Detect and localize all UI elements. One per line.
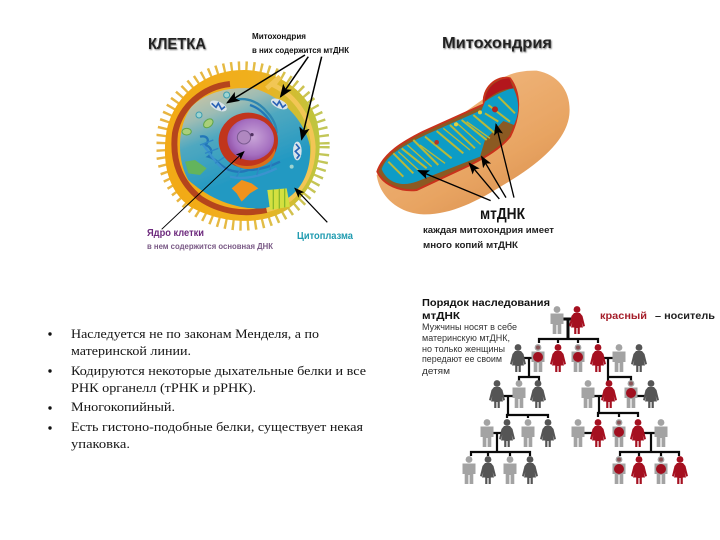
organelles bbox=[182, 92, 294, 210]
label: cell nucleus: в нем содержится основная ДНК bbox=[147, 242, 273, 251]
bullet: encoded proteins bbox=[71, 363, 366, 395]
label: mitochondria contain mtDNA bbox=[252, 32, 349, 55]
pedigree heading text: Мужчины носят в себе bbox=[422, 322, 517, 332]
panel: cell diagram bbox=[162, 55, 327, 229]
cell membrane bbox=[165, 70, 320, 221]
bullet: encoded proteins: Кодируются некоторые дыхательные белки и все bbox=[71, 363, 366, 378]
pedigree heading text: детям bbox=[422, 366, 450, 376]
pedigree heading text: материнскую мтДНК, bbox=[422, 333, 510, 343]
legend: red is carrier: – носитель bbox=[655, 311, 715, 322]
matrix bbox=[382, 88, 518, 184]
bullet: histone-like proteins bbox=[71, 419, 363, 451]
pale right band bbox=[267, 77, 313, 210]
matrix granules bbox=[434, 106, 498, 145]
label: mitochondria contain mtDNA: Митохондрия bbox=[252, 32, 306, 41]
label: cell nucleus bbox=[147, 227, 273, 251]
pedigree heading text: передают ее своим bbox=[422, 354, 502, 364]
bullet markers bbox=[48, 332, 52, 430]
caption: each mitochondrion has many copies: каждая митохондрия имеет bbox=[423, 225, 554, 236]
legend: red is carrier bbox=[600, 311, 715, 322]
pedigree generation 3 bbox=[489, 380, 659, 408]
bulleted text list bbox=[48, 326, 366, 451]
bullet: inheritance: материнской линии. bbox=[71, 343, 191, 358]
arrows to mtDNA bbox=[418, 124, 514, 201]
bullet: inheritance: Наследуется не по законам Менделя, а по bbox=[71, 326, 319, 341]
nucleus bbox=[219, 113, 278, 169]
pedigree generation 1 bbox=[550, 306, 585, 334]
mitochondria in the cell bbox=[208, 96, 302, 160]
label: mtDNA: мтДНК bbox=[480, 206, 525, 223]
bullet: histone-like proteins: Есть гистоно-подобные белки, существует некая bbox=[71, 419, 363, 434]
red-brown inner ring bbox=[174, 84, 267, 212]
pedigree heading text bbox=[422, 298, 550, 376]
cell spikes bbox=[163, 68, 323, 224]
bullet: encoded proteins: РНК органелл (тРНК и рРНК). bbox=[71, 380, 256, 395]
cytoplasm bbox=[180, 88, 310, 208]
cristae bbox=[388, 97, 515, 177]
heading: cell: КЛЕТКА bbox=[148, 36, 206, 53]
endoplasmic reticulum bbox=[200, 99, 280, 178]
pedigree generation 2 bbox=[510, 344, 647, 372]
panel: mitochondrion diagram bbox=[377, 71, 570, 214]
outer membrane red bbox=[485, 78, 513, 102]
legend: red is carrier: красный bbox=[600, 311, 647, 322]
pedigree connecting lines bbox=[471, 319, 679, 456]
outer capsule bbox=[377, 71, 570, 214]
caption: each mitochondrion has many copies: много копий мтДНК bbox=[423, 240, 518, 251]
caption: each mitochondrion has many copies bbox=[423, 225, 554, 251]
bullet: multicopy: Многокопийный. bbox=[71, 399, 175, 414]
pedigree heading text: но только женщины bbox=[422, 344, 505, 354]
arrows to mitochondria and labels bbox=[162, 55, 327, 229]
bullet: inheritance bbox=[71, 326, 319, 358]
label: mitochondria contain mtDNA: в них содержится мтДНК bbox=[252, 46, 349, 55]
pedigree heading text: Порядок наследования bbox=[422, 298, 550, 309]
cut face bbox=[377, 78, 518, 190]
pedigree generation 4 bbox=[480, 419, 668, 447]
label: cell nucleus: Ядро клетки bbox=[147, 227, 204, 239]
pedigree heading text: мтДНК bbox=[422, 311, 461, 322]
heading: mitochondrion: Митохондрия bbox=[442, 35, 552, 52]
label: cytoplasm: Цитоплазма bbox=[297, 230, 353, 242]
bullet: histone-like proteins: упаковка. bbox=[71, 436, 130, 451]
pedigree generation 5 bbox=[462, 456, 688, 484]
